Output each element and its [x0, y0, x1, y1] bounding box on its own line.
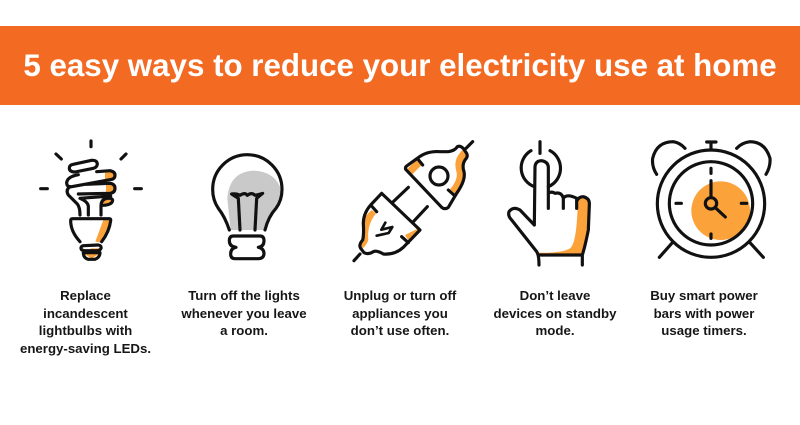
- caption: unplug: [344, 288, 456, 338]
- caption: LEDs: lightbulbs with: [39, 323, 132, 338]
- caption: power bars: bars with power: [654, 306, 754, 321]
- icon: hand pressing power button: [507, 140, 591, 267]
- caption: unplug: appliances you: [352, 306, 448, 321]
- caption: LEDs: [20, 288, 151, 356]
- caption: lights off: Turn off the lights: [188, 288, 300, 303]
- icon: unplugged plug: [352, 140, 474, 262]
- icon: light bulb off: [211, 153, 284, 260]
- caption: LEDs: Replace: [60, 288, 111, 303]
- caption: standby: mode.: [535, 323, 575, 338]
- caption: unplug: Unplug or turn off: [344, 288, 456, 303]
- icon: alarm clock: [650, 140, 772, 259]
- caption: lights off: a room.: [220, 323, 268, 338]
- caption: standby: [494, 288, 616, 338]
- title: 5 easy ways to reduce your electricity use at home: [23, 48, 777, 83]
- caption: power bars: [650, 288, 758, 338]
- caption: unplug: don’t use often.: [351, 323, 449, 338]
- caption: LEDs: incandescent: [43, 306, 128, 321]
- caption: LEDs: energy-saving LEDs.: [20, 341, 151, 356]
- caption: power bars: Buy smart power: [650, 288, 758, 303]
- caption: standby: Don’t leave: [520, 288, 590, 303]
- caption: lights off: [181, 288, 307, 338]
- caption: power bars: usage timers.: [661, 323, 747, 338]
- icon: spiral bulb: [39, 139, 143, 261]
- title banner: [0, 26, 800, 105]
- caption: lights off: whenever you leave: [181, 306, 307, 321]
- caption: standby: devices on standby: [494, 306, 616, 321]
